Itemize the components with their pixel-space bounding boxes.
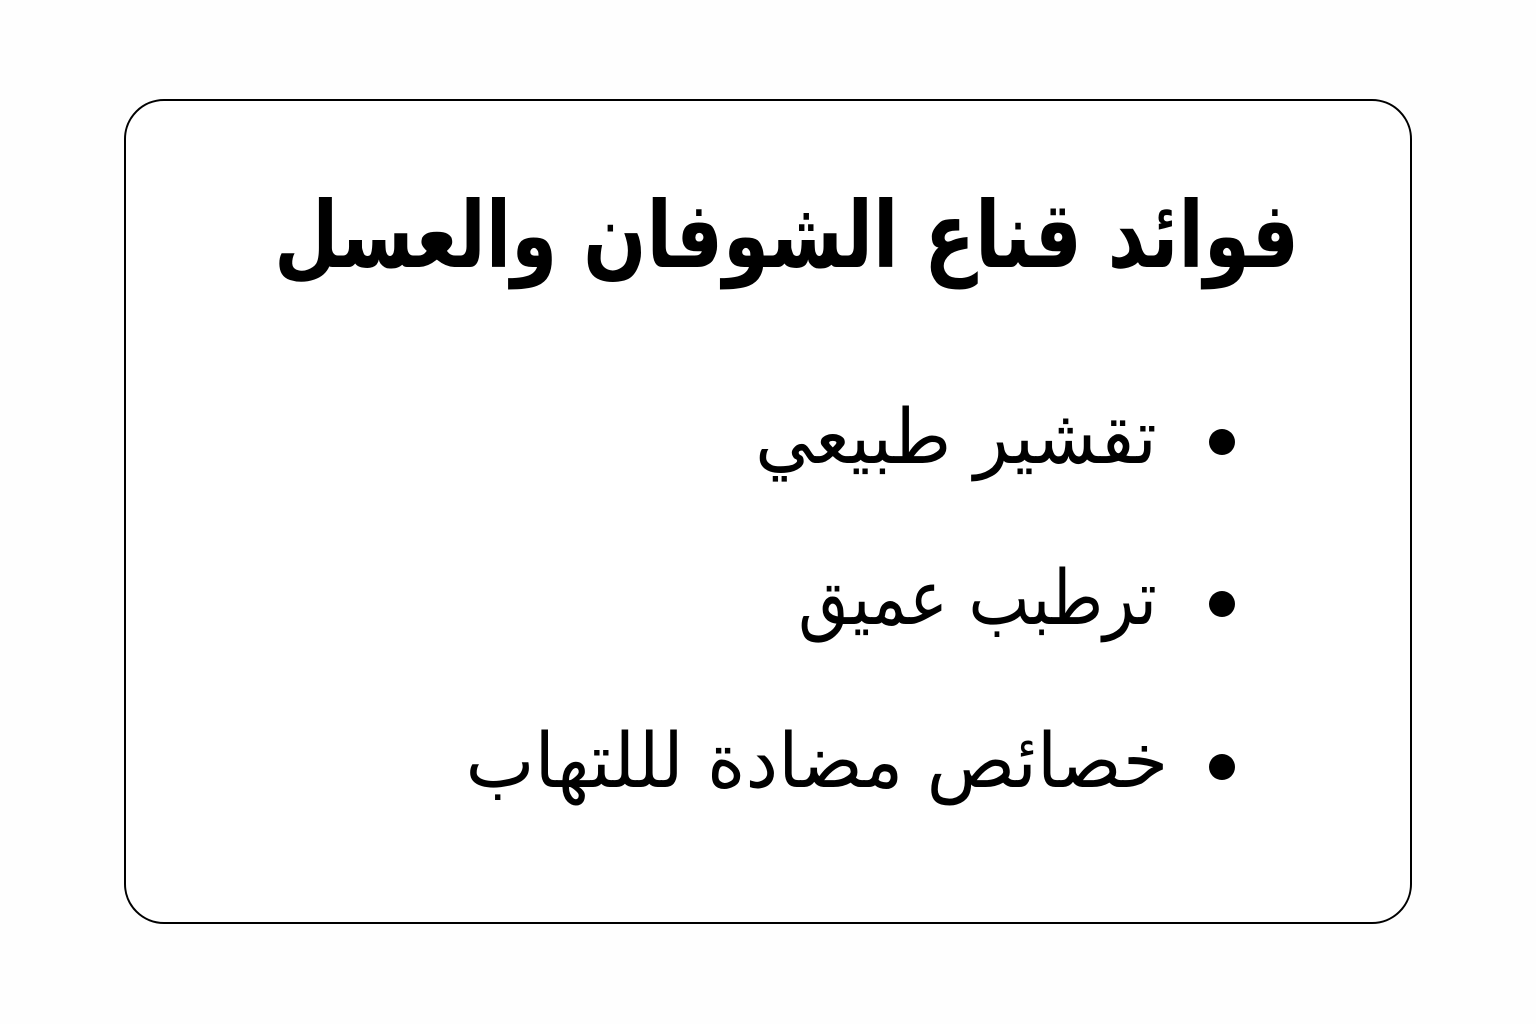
bullet icon 1 (1209, 429, 1235, 455)
bullet icon 2 (1209, 591, 1235, 617)
title: فوائد قناع الشوفان والعسل (274, 182, 1299, 289)
bullet icon 3 (1209, 754, 1235, 780)
list item 3: خصائص مضادة لللتهاب (465, 716, 1168, 805)
list item 2: ترطبب عميق (798, 553, 1157, 642)
list item 1: تقشير طبيعي (755, 392, 1157, 481)
panel: benefits card (124, 99, 1412, 924)
